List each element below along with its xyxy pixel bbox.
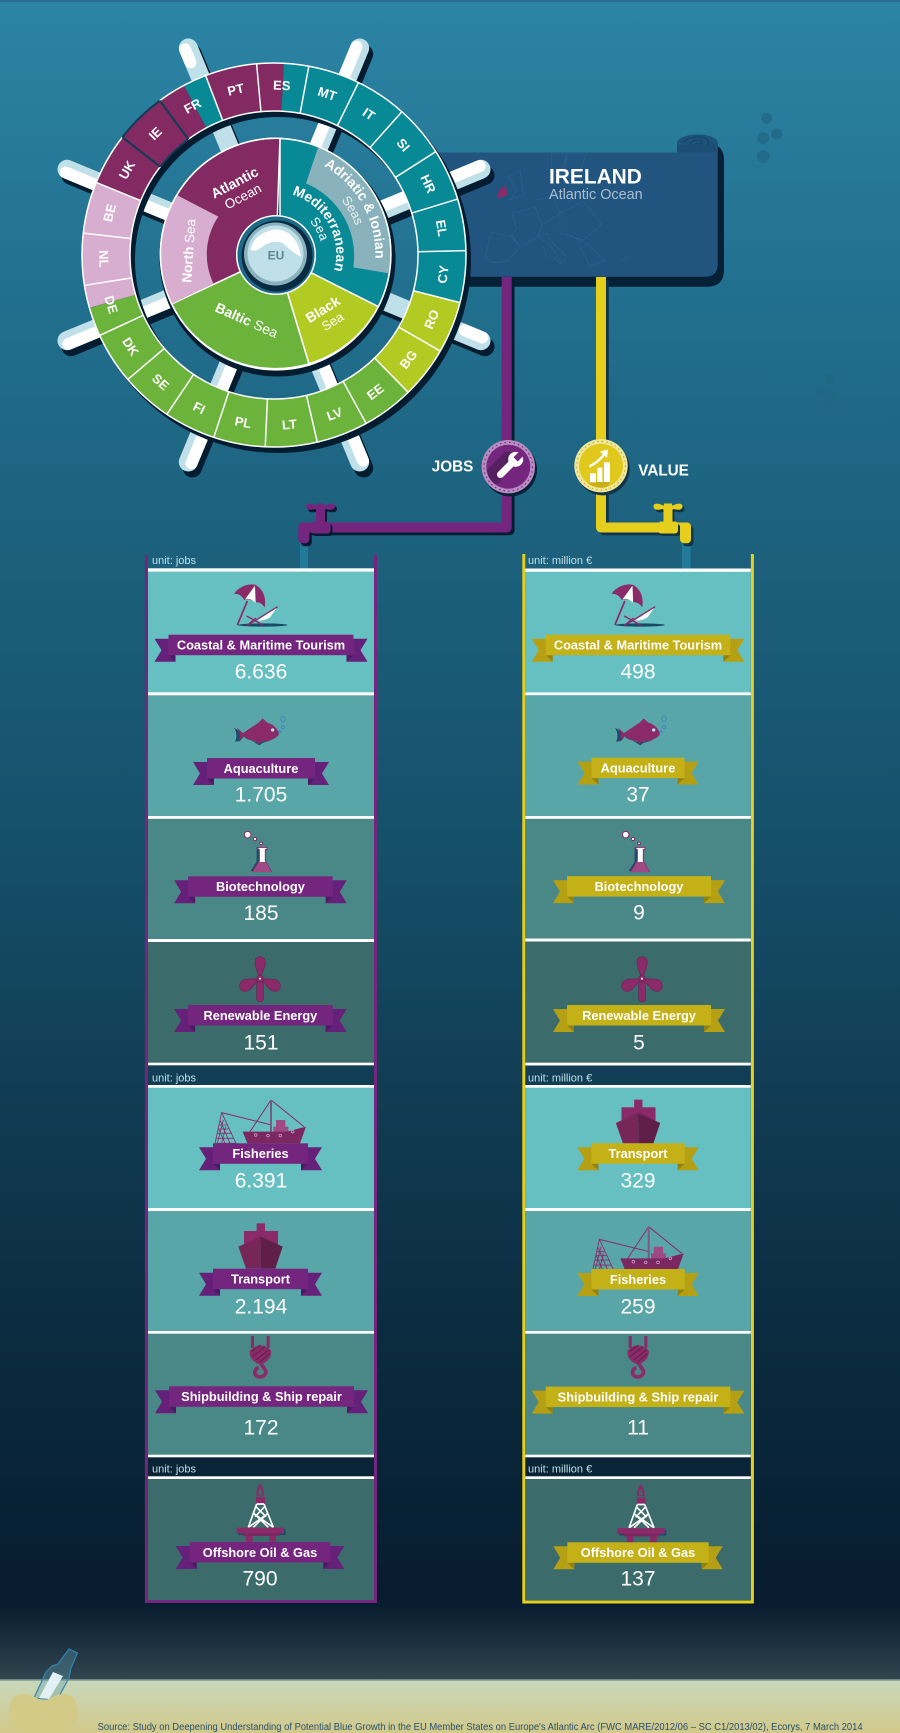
outer ring borders and separators bbox=[82, 63, 466, 447]
panel: scroll with country name and map bbox=[432, 134, 724, 287]
icon: jobs tap bbox=[306, 504, 337, 536]
outer ring: country codes: PT bbox=[226, 80, 246, 99]
outer ring: country codes: SE bbox=[149, 371, 172, 394]
pipe: value bbox=[601, 277, 694, 546]
outer ring: country codes: IT bbox=[360, 105, 378, 124]
outer ring: country codes: CY bbox=[435, 264, 452, 284]
water stream: jobs tap bbox=[300, 543, 308, 569]
row: offshore oil and gas value: 137 bbox=[620, 1568, 656, 1591]
row: biotechnology value: Biotechnology bbox=[595, 879, 684, 894]
outer ring: country codes: LT bbox=[281, 416, 298, 433]
row: biotechnology jobs: Biotechnology bbox=[216, 879, 306, 894]
outer ring: country codes bbox=[96, 77, 452, 433]
icon: message in a bottle bbox=[34, 1649, 78, 1700]
row: transport value: Transport bbox=[608, 1146, 668, 1161]
label: jobs: JOBS bbox=[432, 459, 473, 476]
unit label: value, third: unit: million € bbox=[528, 1463, 592, 1475]
row: fisheries jobs: 6.391 bbox=[235, 1170, 287, 1193]
unit label: jobs, second: unit: jobs bbox=[152, 1073, 197, 1085]
inner disc: basin names: Baltic Sea bbox=[213, 299, 281, 341]
row: renewable energy value: 5 bbox=[633, 1031, 645, 1054]
inner disc: basin names: Mediterranean bbox=[293, 186, 344, 271]
row: shipbuilding value: Shipbuilding & Ship repair bbox=[558, 1389, 718, 1404]
label: value: VALUE bbox=[638, 463, 689, 480]
row: transport jobs: 2.194 bbox=[235, 1295, 288, 1318]
inner disc: basin names: Atlantic bbox=[208, 163, 261, 202]
row: offshore oil and gas value bbox=[525, 1476, 751, 1600]
wheel hub: EU bbox=[237, 216, 315, 294]
unit label: jobs, first: unit: jobs bbox=[152, 555, 197, 567]
row: aquaculture jobs: 1.705 bbox=[235, 784, 287, 807]
wheel hub: EU: EU bbox=[268, 248, 284, 262]
panel: value column bbox=[524, 554, 752, 1602]
outer ring: country codes: IE bbox=[146, 124, 165, 143]
row: transport value: 329 bbox=[620, 1170, 656, 1193]
row: biotechnology value: 9 bbox=[633, 902, 645, 924]
outer ring: country codes: BG bbox=[396, 347, 420, 372]
outer ring: member state segments bbox=[36, 17, 512, 493]
inner disc: basin names bbox=[179, 160, 385, 341]
unit label: jobs, third: unit: jobs bbox=[152, 1463, 197, 1475]
inner disc: basin names: Sea bbox=[311, 218, 326, 242]
outer ring: country codes: EL bbox=[433, 219, 450, 238]
row: coastal tourism value: Coastal & Maritime Tourism bbox=[554, 638, 722, 653]
row: fisheries value bbox=[525, 1208, 751, 1332]
outer ring shadow bbox=[110, 92, 446, 428]
row: biotechnology value bbox=[525, 816, 751, 940]
outer ring: country codes: FR bbox=[181, 95, 204, 117]
row: aquaculture jobs: Aquaculture bbox=[224, 761, 298, 776]
outer ring: country codes: BE bbox=[100, 202, 119, 223]
highlighted segment outline: Ireland bbox=[5, 0, 543, 524]
row: renewable energy jobs: 151 bbox=[243, 1031, 279, 1054]
row: aquaculture value: Aquaculture bbox=[601, 760, 675, 775]
row: coastal tourism jobs: 6.636 bbox=[235, 660, 287, 683]
row: fisheries jobs: Fisheries bbox=[232, 1146, 289, 1161]
sea floor: sand bbox=[0, 1679, 900, 1733]
outer ring: country codes: NL bbox=[96, 250, 112, 268]
row: coastal tourism jobs: Coastal & Maritime Tourism bbox=[177, 638, 345, 653]
row: fisheries value: Fisheries bbox=[610, 1272, 666, 1287]
wheel spokes bbox=[66, 47, 485, 468]
row: shipbuilding jobs bbox=[148, 1331, 374, 1457]
panel: jobs column bbox=[146, 555, 376, 1602]
bubbles: upper right bbox=[757, 113, 782, 163]
outer ring: country codes: DK bbox=[119, 335, 142, 359]
inner disc: basin names: Seas bbox=[342, 196, 362, 225]
outer ring: country codes: RO bbox=[421, 307, 442, 331]
inner disc: basin names: Sea bbox=[319, 309, 347, 334]
row: coastal tourism jobs bbox=[148, 568, 374, 694]
row: renewable energy jobs: Renewable Energy bbox=[204, 1008, 318, 1023]
row: transport jobs bbox=[148, 1208, 374, 1332]
inner disc shadow bbox=[160, 140, 396, 376]
inner disc: sea basins bbox=[160, 138, 391, 370]
jobs column frame bbox=[146, 555, 376, 1602]
row: shipbuilding jobs: 172 bbox=[243, 1416, 279, 1439]
outer ring: country codes: HR bbox=[417, 172, 439, 196]
row: coastal tourism value bbox=[525, 568, 751, 694]
row: coastal tourism value: 498 bbox=[620, 660, 656, 684]
row: shipbuilding value bbox=[525, 1331, 751, 1457]
row: aquaculture jobs bbox=[148, 692, 374, 818]
row: shipbuilding value: 11 bbox=[627, 1416, 649, 1439]
water stream: value tap bbox=[682, 543, 691, 569]
row: transport value bbox=[525, 1085, 751, 1210]
source note: Source: Study on Deepening Understanding of Potential Blue Growth in the EU Member States on Europe's Atlantic Arc (FWC MARE/2012/06 – SC C1/2013/02), Ecorys, 7 March 2014 bbox=[98, 1722, 863, 1733]
row: offshore oil and gas jobs: Offshore Oil & Gas bbox=[203, 1545, 317, 1560]
row: transport jobs: Transport bbox=[231, 1271, 291, 1286]
row: aquaculture value bbox=[525, 692, 751, 818]
row: renewable energy value: Renewable Energy bbox=[582, 1008, 697, 1023]
inner disc: basin names: Black bbox=[303, 293, 343, 326]
row: biotechnology jobs: 185 bbox=[243, 902, 279, 925]
outer ring: country codes: DE bbox=[101, 294, 121, 316]
unit label: value, first: unit: million € bbox=[528, 555, 592, 567]
map highlight: Ireland bbox=[497, 186, 507, 198]
outer ring: country codes: EE bbox=[364, 380, 387, 403]
outer ring: country codes: ES bbox=[273, 77, 291, 93]
country name: IRELAND bbox=[549, 165, 642, 188]
row: offshore oil and gas jobs bbox=[148, 1476, 374, 1600]
sand mound bbox=[9, 1694, 78, 1733]
outer ring: country codes: UK bbox=[116, 158, 138, 182]
icon: value tap bbox=[654, 504, 684, 536]
row: fisheries jobs bbox=[148, 1085, 374, 1210]
row: offshore oil and gas jobs: 790 bbox=[242, 1568, 278, 1591]
unit label: value, second: unit: million € bbox=[528, 1073, 592, 1085]
europe map outline bbox=[485, 153, 627, 267]
row: aquaculture value: 37 bbox=[626, 784, 650, 807]
outer ring: country codes: PL bbox=[234, 413, 253, 431]
outer ring: country codes: SI bbox=[394, 135, 413, 154]
outer ring: country codes: FI bbox=[191, 399, 208, 417]
row: biotechnology jobs bbox=[148, 816, 374, 940]
row: renewable energy jobs bbox=[148, 939, 374, 1065]
sea basin name: Atlantic Ocean bbox=[549, 187, 643, 203]
icon: jobs wrench badge bbox=[482, 440, 537, 496]
outer ring: country codes: MT bbox=[316, 84, 339, 104]
row: offshore oil and gas value: Offshore Oil & Gas bbox=[581, 1545, 695, 1560]
inner disc: basin names: North Sea bbox=[179, 218, 199, 283]
row: shipbuilding jobs: Shipbuilding & Ship repair bbox=[181, 1389, 342, 1404]
inner disc: basin names: Ocean bbox=[222, 181, 264, 212]
row: fisheries value: 259 bbox=[620, 1295, 656, 1318]
ship wheel bbox=[58, 38, 494, 478]
row: renewable energy value bbox=[525, 938, 751, 1066]
outer ring: country codes: LV bbox=[325, 404, 345, 424]
value column frame bbox=[524, 554, 752, 1602]
inner disc: basin names: Adriatic & Ionian bbox=[324, 160, 385, 258]
pipe: jobs bbox=[298, 277, 510, 546]
icon: value chart badge bbox=[574, 439, 630, 495]
bubbles: right middle bbox=[816, 375, 836, 414]
